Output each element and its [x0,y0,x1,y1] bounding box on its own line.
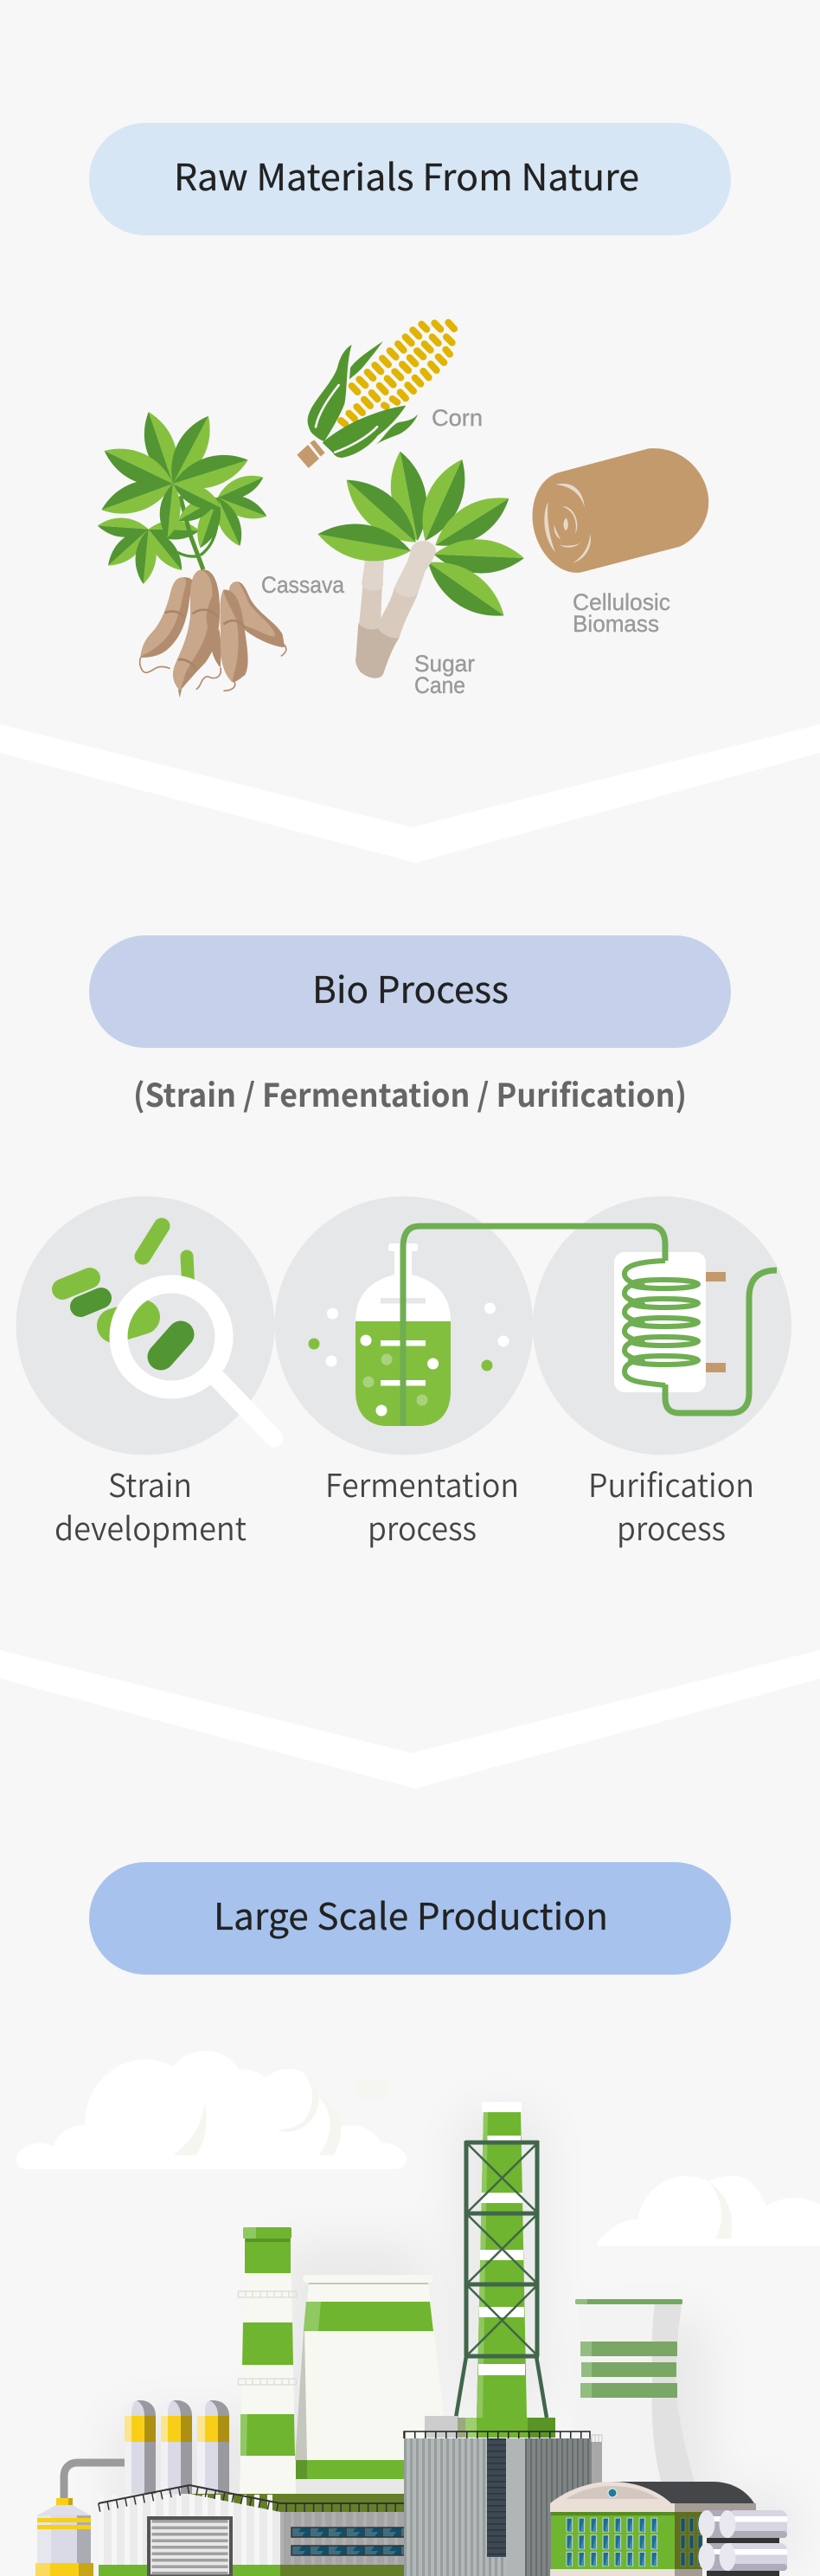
heading: Bio Process: Bio Process [312,961,509,1014]
arrow: chevron 1 [0,724,820,863]
label: Purification process: process [617,1503,726,1550]
illustration: tall lattice tower [456,2102,555,2438]
label: Strain development: development [54,1503,247,1550]
circle background [533,1196,791,1455]
circle background [275,1196,533,1455]
icon: condenser [614,1252,726,1392]
illustration: pale cooling tower [571,2299,695,2482]
label: Fermentation process [325,1460,519,1550]
illustration: cellulosic biomass roll [532,448,708,573]
label: Sugar Cane: Sugar [414,651,475,677]
circle background [16,1196,275,1455]
label: Cassava: Cassava [261,572,345,598]
icon: bubbles around flask [308,1303,509,1371]
label: Strain development [54,1460,247,1550]
icon: bacteria [62,1226,189,1357]
panel: purification process [533,1196,791,1455]
illustration: pipe and yellow tank [35,2463,125,2576]
illustration: gray main building [404,2416,602,2576]
icon: flask [356,1243,451,1426]
heading: Large Scale Production: Large Scale Production [214,1888,608,1941]
label: Fermentation process: Fermentation [325,1460,519,1506]
label: Sugar Cane [414,651,475,698]
subheading: Strain / Fermentation / Purification: (Strain / Fermentation / Purification) [133,1070,687,1116]
illustration: warehouse [99,2485,405,2576]
illustration: corn [297,323,454,468]
label: Sugar Cane: Cane [414,672,465,698]
soft shadows behind factory [112,2111,796,2576]
heading: Raw Materials From Nature: Raw Materials From Nature [174,149,639,202]
illustration: silos [125,2400,229,2494]
pipe connecting flask to condenser [403,1226,777,1426]
arrow: chevron 2 [0,1650,820,1789]
illustration: stacked pipes [699,2510,787,2576]
illustration: cloud left [16,2051,407,2169]
label: Cellulosic Biomass [573,589,670,637]
illustration: sugar cane [315,448,525,678]
panel: strain development [16,1196,275,1455]
label: Strain development: Strain [108,1460,192,1506]
label: Cellulosic Biomass: Biomass [573,611,659,637]
illustration: cassava [97,408,286,698]
label: Corn: Corn [432,405,483,431]
heading: Large Scale Production [89,1862,731,1975]
illustration: cloud right [598,2176,820,2246]
panel: fermentation process [275,1196,533,1455]
label: Purification process [588,1460,754,1550]
label: Fermentation process: process [368,1503,477,1550]
heading: Raw Materials From Nature [89,123,731,235]
heading: Bio Process [89,935,731,1048]
label: Purification process: Purification [588,1460,754,1506]
icon: magnifying glass [119,1284,274,1438]
label: Cellulosic Biomass: Cellulosic [573,589,670,615]
illustration: large cream cooling tower [295,2275,445,2494]
illustration: green office building [550,2482,756,2576]
illustration: striped chimney [239,2227,296,2494]
